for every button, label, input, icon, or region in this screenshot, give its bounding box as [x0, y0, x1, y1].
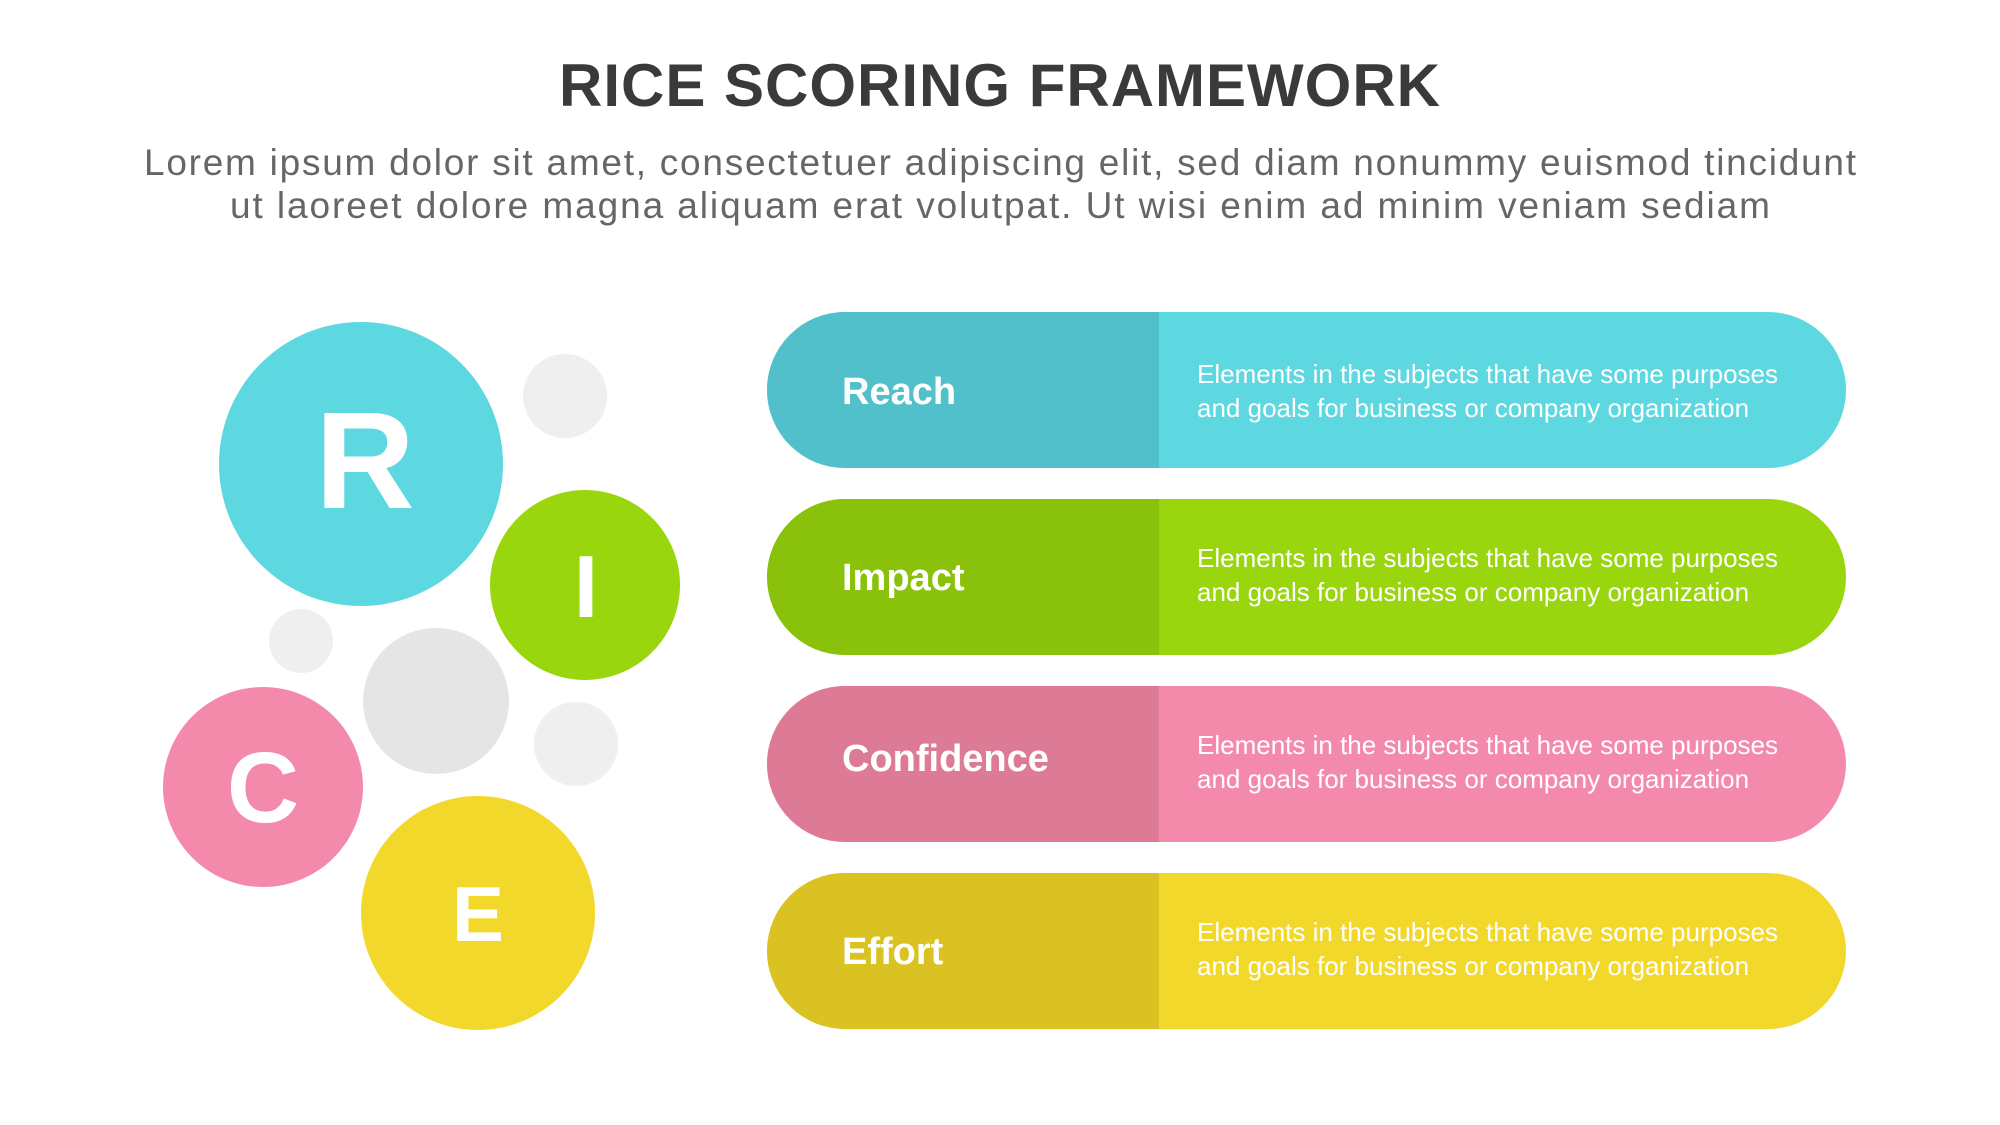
row: Reach: Elements in the subjects that have some purposes [1197, 359, 1778, 389]
row: Reach: and goals for business or company organization [1197, 393, 1749, 423]
subtitle: ut laoreet dolore magna aliquam erat volutpat. Ut wisi enim ad minim veniam sediam [230, 185, 1770, 226]
row: Confidence: Confidence [842, 738, 1049, 780]
row: Effort [767, 873, 1846, 1029]
title: RICE SCORING FRAMEWORK [559, 52, 1441, 119]
bubble I [490, 490, 680, 680]
bubble C: C [227, 732, 299, 844]
row: Effort: Effort [842, 931, 944, 973]
bubble E [361, 796, 595, 1030]
row: Impact: Elements in the subjects that have some purposes [1197, 543, 1778, 573]
bubble R: R [315, 384, 415, 538]
row: Impact [767, 499, 1846, 655]
subtitle: Lorem ipsum dolor sit amet, consectetuer adipiscing elit, sed diam nonummy euismod tincidunt [144, 142, 1857, 183]
subtitle [144, 142, 1857, 226]
row: Confidence: and goals for business or company organization [1197, 764, 1749, 794]
row: Effort: and goals for business or company organization [1197, 951, 1749, 981]
row: Confidence: Elements in the subjects that have some purposes [1197, 730, 1778, 760]
bubble C [163, 687, 363, 887]
bubble E: E [452, 870, 504, 958]
row: Confidence [767, 686, 1846, 842]
row: Effort: Elements in the subjects that have some purposes [1197, 917, 1778, 947]
bubble R [219, 322, 503, 606]
row: Impact: Impact [842, 557, 965, 599]
gray bubbles [269, 354, 618, 786]
row: Reach [767, 312, 1846, 468]
bubble cluster [163, 322, 680, 1030]
bubble I: I [574, 537, 598, 636]
row: Reach: Reach [842, 371, 956, 413]
row: Impact: and goals for business or company organization [1197, 577, 1749, 607]
